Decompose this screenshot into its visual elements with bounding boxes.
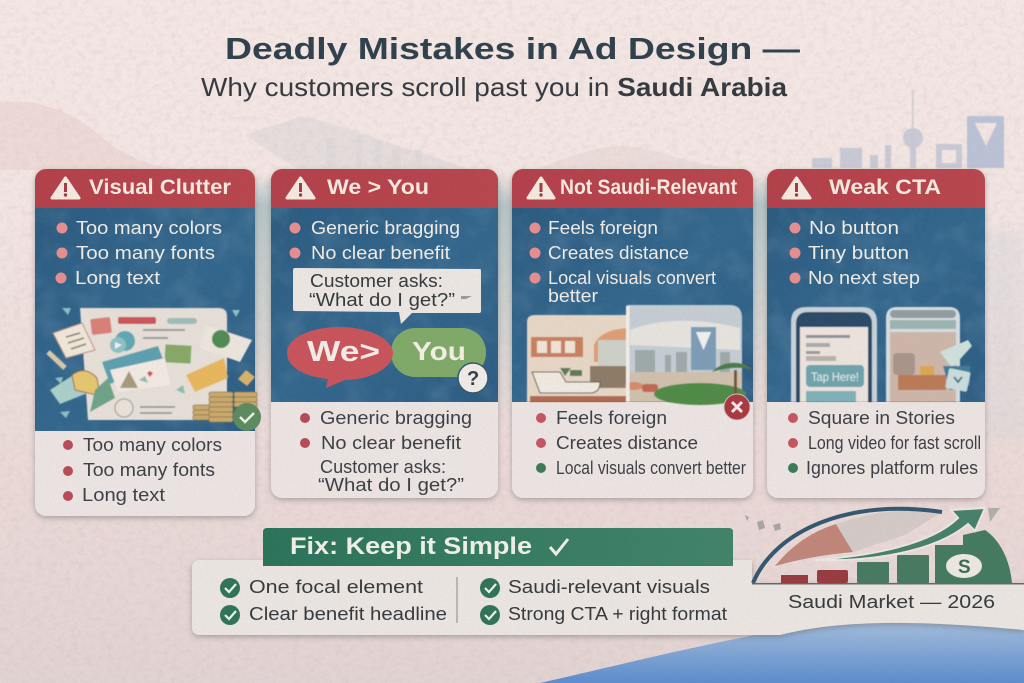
warning icon (528, 178, 554, 198)
lower bullets: Long video for fast scroll (808, 433, 981, 453)
illustration: cluttered ad collage (48, 308, 257, 422)
warning icon (287, 178, 314, 198)
fix banner: Fix: Keep it Simple (290, 533, 532, 560)
upper bullets: Feels foreign (548, 218, 658, 238)
lower bullets: Feels foreign (556, 408, 667, 428)
upper bullets: Tiny button (808, 243, 909, 263)
icon: check badge (233, 403, 261, 431)
heading: Not Saudi-Relevant (560, 176, 737, 199)
fix list right: Strong CTA + right format (508, 604, 727, 624)
upper bullets: Generic bragging (311, 218, 460, 238)
market growth chart: S (958, 557, 971, 578)
lower bullets: Customer asks: (320, 457, 446, 477)
speech bubble: customer question: Customer asks: (310, 271, 443, 291)
upper bullets: Too many fonts (76, 243, 215, 263)
lower bullets: Generic bragging (320, 408, 472, 428)
card: We > You (271, 169, 498, 498)
icon: x badge (724, 394, 750, 420)
upper bullets: better (548, 286, 598, 306)
upper bullets: Too many colors (76, 218, 222, 238)
lower bullets: “What do I get?” (318, 475, 464, 495)
market growth chart (745, 508, 1024, 584)
heading: Visual Clutter (89, 176, 231, 199)
lower bullets (63, 435, 222, 505)
upper bullets: No clear benefit (311, 243, 450, 263)
heading: Weak CTA (829, 176, 941, 199)
fix list left: Clear benefit headline (249, 604, 447, 624)
fix panel (192, 528, 1024, 635)
fix list left (220, 577, 447, 625)
title: Deadly Mistakes in Ad Design — (225, 31, 800, 66)
icon: question badge (458, 363, 488, 393)
lower bullets: Too many fonts (83, 460, 215, 480)
upper bullets: Creates distance (548, 243, 689, 263)
upper bullets (56, 218, 222, 288)
card: Not Saudi-Relevant (512, 169, 753, 498)
decorative blue wave (540, 622, 1024, 683)
lower bullets: No clear benefit (321, 433, 461, 453)
lower bullets (300, 408, 472, 495)
card: Visual Clutter (35, 169, 261, 516)
bubble: We: We> (307, 336, 380, 368)
fix list right (480, 577, 727, 625)
illustration: phone with wrong format ad (886, 307, 972, 402)
market label: Saudi Market — 2026 (788, 592, 995, 612)
bubble: You (391, 328, 486, 377)
lower bullets: Too many colors (83, 435, 222, 455)
illustration: phone with tiny button (791, 307, 877, 402)
upper bullets: No next step (808, 268, 920, 288)
heading: We > You (327, 176, 429, 199)
upper bullets (290, 218, 460, 263)
speech bubble: customer question (293, 268, 481, 324)
bubble: You: You (412, 336, 466, 366)
lower bullets: Square in Stories (808, 408, 955, 428)
warning icon (783, 178, 810, 198)
card: Weak CTA (767, 169, 985, 498)
fix list left: One focal element (249, 577, 423, 597)
skyline: central faint city (245, 116, 470, 170)
lower bullets (536, 408, 746, 478)
fix list right: Saudi-relevant visuals (508, 577, 710, 597)
lower bullets: Long text (82, 485, 165, 505)
subtitle: Why customers scroll past you in Saudi Arabia (201, 72, 788, 102)
upper bullets: No button (809, 218, 899, 238)
lower bullets: Creates distance (556, 433, 698, 453)
upper bullets: Local visuals convert (548, 268, 716, 288)
lower bullets: Local visuals convert better (556, 458, 746, 478)
lower bullets (788, 408, 981, 478)
icon: question badge: ? (467, 368, 479, 390)
skyline: Riyadh landmarks (812, 90, 1004, 168)
upper bullets (530, 218, 716, 306)
warning icon (52, 178, 79, 198)
lower bullets: Ignores platform rules (806, 458, 978, 478)
fix banner (263, 528, 733, 566)
illustration: phone with tiny button: Tap Here! (811, 370, 859, 384)
illustration: foreign interior vs Saudi city (527, 305, 752, 405)
bubble: We (287, 327, 393, 388)
upper bullets: Long text (75, 268, 160, 288)
upper bullets (790, 218, 920, 288)
speech bubble: customer question: “What do I get?” (309, 290, 455, 310)
